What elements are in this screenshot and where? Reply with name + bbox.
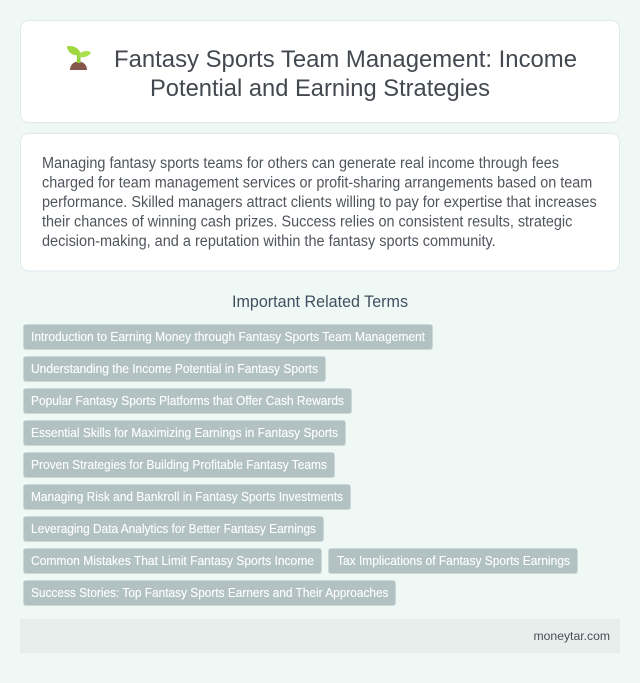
tag 10: Success Stories: Top Fantasy Sports Earners and Their Approaches (31, 585, 388, 600)
tag 6: Managing Risk and Bankroll in Fantasy Sports Investments (31, 489, 343, 504)
tag 7 (24, 516, 324, 542)
tag 3: Popular Fantasy Sports Platforms that Offer Cash Rewards (31, 393, 344, 408)
icon: seedling (67, 46, 91, 70)
tag 9: Tax Implications of Fantasy Sports Earnings (337, 553, 570, 568)
tag 3 (24, 388, 352, 414)
heading: important related terms: Important Related Terms (232, 293, 408, 311)
panel: description (20, 134, 620, 271)
tag 1: Introduction to Earning Money through Fantasy Sports Team Management (31, 329, 425, 344)
tag 8 (24, 548, 322, 574)
title: Potential and Earning Strategies (150, 75, 490, 102)
description text: charged for team management services or profit-sharing arrangements based on team (42, 174, 592, 192)
tag 4: Essential Skills for Maximizing Earnings in Fantasy Sports (31, 425, 338, 440)
description text: performance. Skilled managers attract clients willing to pay for expertise that increases (42, 194, 597, 211)
tag 7: Leveraging Data Analytics for Better Fantasy Earnings (31, 521, 316, 536)
title: Fantasy Sports Team Management: Income (114, 46, 577, 73)
tag 10 (24, 580, 396, 606)
tag list (24, 324, 578, 606)
tag 6 (24, 484, 350, 510)
tag 8: Common Mistakes That Limit Fantasy Sports Income (31, 553, 314, 568)
footer source text: moneytar.com (534, 629, 610, 643)
footer (20, 619, 620, 653)
description text (42, 155, 597, 250)
panel: title card (20, 20, 620, 122)
tag 2: Understanding the Income Potential in Fantasy Sports (31, 361, 318, 376)
description text: decision-making, and a reputation within the fantasy sports community. (42, 233, 496, 250)
title (114, 46, 577, 102)
tag 5 (24, 452, 334, 478)
description text: Managing fantasy sports teams for others can generate real income through fees (42, 155, 559, 172)
tag 4 (24, 420, 346, 446)
tag 9 (328, 548, 578, 574)
tag 5: Proven Strategies for Building Profitable Fantasy Teams (31, 457, 327, 472)
tag 2 (24, 356, 326, 382)
description text: their chances of winning cash prizes. Success relies on consistent results, strategic (42, 214, 573, 230)
tag 1 (24, 324, 432, 350)
